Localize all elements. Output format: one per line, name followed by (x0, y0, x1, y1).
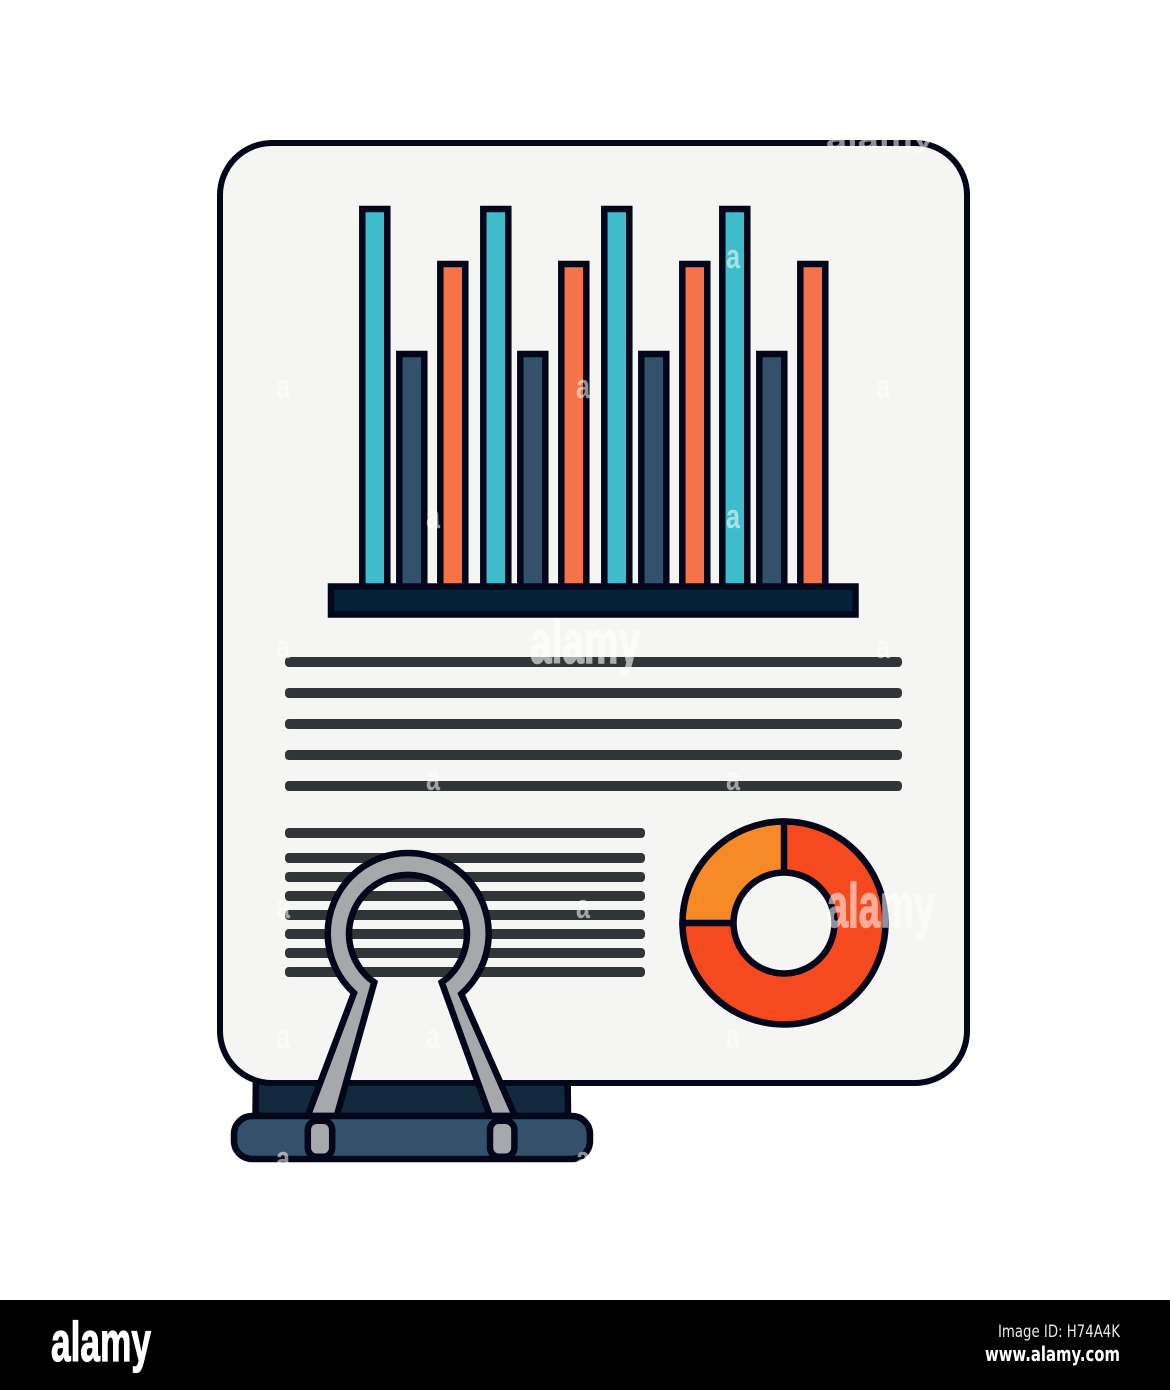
watermarks: a (276, 368, 291, 406)
watermarks: a (276, 888, 291, 926)
watermarks: a (276, 1018, 291, 1056)
bars: teal series (362, 209, 747, 587)
watermarks: a (726, 760, 741, 798)
watermarks: a (426, 760, 441, 798)
chart baseline (331, 586, 856, 614)
watermarks: alamy (826, 124, 935, 154)
watermarks: a (276, 628, 291, 666)
footer bar (0, 1300, 1170, 1390)
watermarks: a (876, 628, 891, 666)
icon: binder clip left tab (308, 1121, 332, 1157)
icon: binder clip back plate (256, 1070, 568, 1116)
watermarks: a (426, 1018, 441, 1056)
watermarks: a (576, 1140, 591, 1178)
watermarks: a (276, 1140, 291, 1178)
text block: full-width lines (285, 657, 902, 791)
bars: orange series (440, 264, 825, 587)
bar chart (331, 209, 856, 614)
watermarks: a (576, 368, 591, 406)
image id: Image ID: H74A4K (998, 1322, 1121, 1342)
donut chart (682, 822, 886, 1024)
watermarks: alamy (530, 609, 640, 676)
icon: binder clip right tab (490, 1121, 514, 1157)
watermarks: a (876, 368, 891, 406)
watermarks: a (726, 1018, 741, 1056)
watermarks: alamy (827, 872, 935, 941)
watermarks: a (726, 238, 741, 276)
watermarks: a (576, 888, 591, 926)
watermarks: a (726, 498, 741, 536)
icon: binder clip handle (308, 853, 515, 1116)
panel: document sheet (220, 143, 967, 1083)
icon: binder clip front bar (234, 1116, 590, 1159)
text block: short lines (285, 828, 645, 977)
footer logo: alamy (51, 1310, 151, 1373)
watermarks: a (426, 498, 441, 536)
website: www.alamy.com (985, 1342, 1120, 1366)
watermarks (276, 124, 935, 1178)
bars: navy series (399, 354, 784, 587)
